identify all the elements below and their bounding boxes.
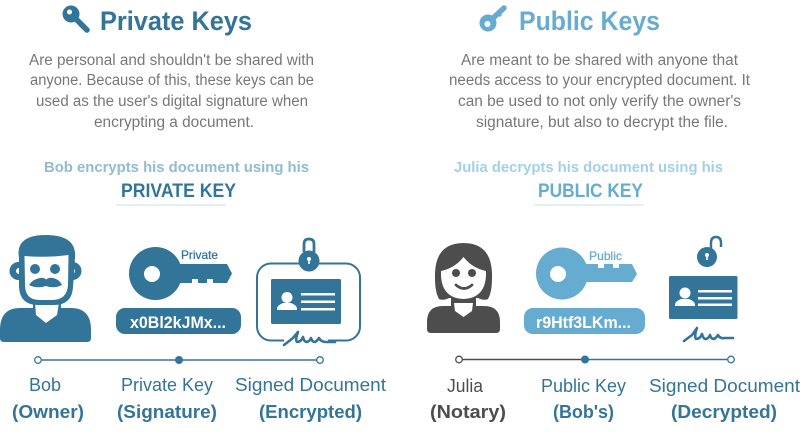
text block: private description: anyone. Because of this, these keys can be — [30, 72, 314, 89]
labels: signed document decrypted — [649, 376, 800, 422]
text block: private description — [29, 52, 314, 131]
labels: public key bobs — [541, 376, 626, 422]
key value pill — [116, 308, 241, 334]
text block: public description — [449, 52, 751, 131]
labels: private key signature — [117, 375, 217, 422]
labels: signed document decrypted: Signed Document — [649, 376, 800, 396]
icon: public key small — [480, 8, 504, 32]
text block: public description: can be used to not only verify the owner's — [458, 93, 741, 110]
labels: signed document encrypted — [235, 375, 386, 422]
text block: private description: used as the user's digital signature when — [36, 93, 308, 110]
text block: public description: signature, but also to decrypt the file. — [476, 114, 728, 131]
labels: julia notary: Julia — [447, 376, 484, 396]
icon: private key large — [129, 247, 232, 300]
labels: julia notary: (Notary) — [430, 402, 506, 422]
icon: bob — [0, 235, 91, 342]
icon: private key small — [62, 6, 87, 30]
key value pill — [524, 308, 645, 334]
panel: private keys — [0, 6, 386, 422]
labels: bob owner: (Owner) — [12, 402, 84, 422]
labels: public key bobs: Public Key — [541, 376, 626, 396]
labels: signed document encrypted: Signed Document — [235, 375, 386, 395]
text block: public description: needs access to your encrypted document. It — [449, 72, 751, 89]
subheading: private key: PRIVATE KEY — [121, 181, 236, 202]
subheading: public key: PUBLIC KEY — [538, 181, 643, 202]
labels: signed document encrypted: (Encrypted) — [259, 402, 362, 422]
labels: private key signature: (Signature) — [117, 402, 217, 422]
labels: julia notary — [430, 376, 506, 422]
timeline: private — [35, 356, 323, 364]
icon: encrypted signed document — [257, 239, 360, 345]
icon: decrypted signed document — [669, 237, 738, 341]
heading: private keys: Private Keys — [100, 6, 252, 36]
icon: public key large — [536, 248, 637, 300]
text block: private description: encrypting a document. — [94, 114, 254, 131]
label: public: Public — [589, 249, 622, 263]
key value pill: x0Bl2kJMx... — [130, 313, 226, 332]
label: private: Private — [181, 248, 218, 262]
labels: signed document decrypted: (Decrypted) — [671, 402, 777, 422]
panel: public keys — [427, 6, 800, 422]
key value pill: r9Htf3LKm... — [536, 313, 631, 332]
timeline: public — [456, 356, 734, 364]
text block: private description: Are personal and shouldn't be shared with — [29, 52, 314, 69]
labels: bob owner: Bob — [29, 375, 61, 395]
labels: public key bobs: (Bob's) — [553, 402, 614, 422]
icon: julia — [427, 243, 500, 333]
labels: bob owner — [12, 375, 84, 422]
subheading: julia decrypts: Julia decrypts his document using his — [454, 159, 723, 176]
subheading: bob encrypts: Bob encrypts his document using his — [44, 159, 309, 176]
labels: private key signature: Private Key — [121, 375, 213, 395]
heading: public keys: Public Keys — [519, 6, 660, 36]
text block: public description: Are meant to be shared with anyone that — [461, 52, 739, 69]
